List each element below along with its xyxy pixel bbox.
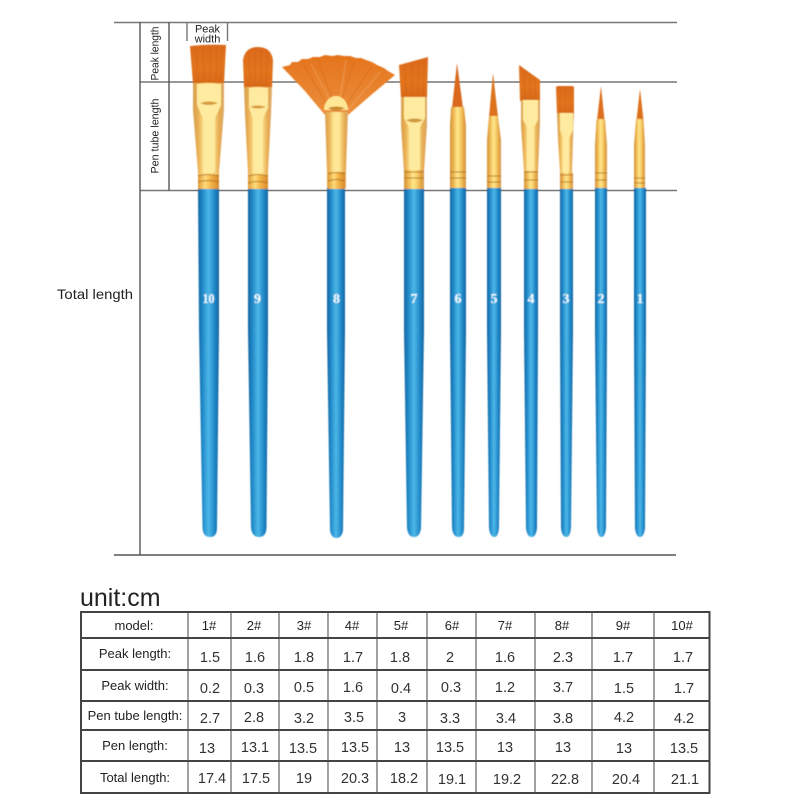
row: peak width: 1.6 xyxy=(343,680,363,696)
label: peak width: Peak xyxy=(195,24,221,36)
row: pen tube length: 4.2 xyxy=(674,711,694,727)
row: model: 7# xyxy=(498,618,513,633)
row: peak length: Peak length: xyxy=(99,646,171,661)
row: model: 2# xyxy=(247,618,262,633)
row: total length: 18.2 xyxy=(390,771,418,787)
brush 7: 7 xyxy=(410,292,418,307)
label: peak width: width xyxy=(194,34,220,46)
brush 7 xyxy=(399,57,428,537)
brush 5: 5 xyxy=(490,292,498,307)
label: total length: Total length xyxy=(57,286,133,302)
row: pen length: 13.5 xyxy=(289,741,317,757)
row: peak width: 1.2 xyxy=(495,680,515,696)
row: peak width: 0.4 xyxy=(391,681,411,697)
row: pen tube length: 3.5 xyxy=(344,710,364,726)
brush 2 xyxy=(595,86,607,537)
row: peak length: 2.3 xyxy=(553,650,573,666)
row: total length: 17.4 xyxy=(198,771,226,787)
brush 9: 9 xyxy=(254,292,261,307)
row: pen tube length: 3.4 xyxy=(496,711,516,727)
row: peak length: 1.8 xyxy=(294,650,314,666)
row: peak length: 1.7 xyxy=(343,650,363,666)
row: model: 5# xyxy=(394,618,409,633)
brush 8: 8 xyxy=(333,292,340,307)
label: peak length: Peak length xyxy=(150,26,162,80)
row: peak width: 1.5 xyxy=(614,681,634,697)
row: total length: 21.1 xyxy=(671,772,699,788)
brush 5 xyxy=(487,73,501,537)
brush 3 xyxy=(556,86,574,537)
row: model: 6# xyxy=(445,618,460,633)
row: peak width: 1.7 xyxy=(674,681,694,697)
row: peak length: 1.7 xyxy=(613,650,633,666)
brush 10 xyxy=(190,45,226,537)
row: pen tube length: 3.2 xyxy=(294,711,314,727)
row: pen length xyxy=(102,738,698,757)
row: total length: Total length: xyxy=(100,770,170,785)
row: model: 3# xyxy=(297,618,312,633)
row: pen length: 13.5 xyxy=(341,740,369,756)
row: peak width: Peak width: xyxy=(101,678,169,693)
brush 1: 1 xyxy=(636,292,644,307)
row: total length: 19.1 xyxy=(438,772,466,788)
row: model: 9# xyxy=(616,618,631,633)
row: peak length: 1.7 xyxy=(673,650,693,666)
row: total length: 20.4 xyxy=(612,772,640,788)
row: total length: 19.2 xyxy=(493,772,521,788)
row: pen length: 13.5 xyxy=(670,741,698,757)
row: pen tube length xyxy=(88,708,694,727)
brush 9 xyxy=(243,47,273,537)
row: model: 8# xyxy=(555,618,570,633)
row: peak width: 3.7 xyxy=(553,680,573,696)
row: total length: 22.8 xyxy=(551,772,579,788)
row: pen tube length: 4.2 xyxy=(614,710,634,726)
row: pen length: 13 xyxy=(497,740,513,756)
row: pen length: 13.5 xyxy=(436,740,464,756)
row: peak length: 2 xyxy=(446,650,454,666)
brush 4: 4 xyxy=(528,292,534,307)
brush 10: 10 xyxy=(202,292,214,307)
row: pen length: 13 xyxy=(616,741,632,757)
row: peak width: 0.3 xyxy=(441,680,461,696)
row: pen tube length: 2.8 xyxy=(244,710,264,726)
brush 4 xyxy=(519,65,540,537)
row: pen length: 13 xyxy=(555,740,571,756)
row: model: model: xyxy=(114,618,154,633)
row: model: 10# xyxy=(671,618,694,633)
measurement guide lines xyxy=(114,22,677,555)
brush 8 xyxy=(282,55,395,538)
unit label: unit:cm xyxy=(80,584,161,612)
row: pen length: Pen length: xyxy=(102,738,168,753)
brush 6: 6 xyxy=(454,292,462,307)
row: pen tube length: 3.3 xyxy=(440,711,460,727)
row: model xyxy=(114,618,694,633)
row: pen tube length: 3 xyxy=(398,710,406,726)
row: peak width: 0.5 xyxy=(294,680,314,696)
row: model: 1# xyxy=(202,618,217,633)
brush 2: 2 xyxy=(598,292,604,307)
row: pen tube length: 3.8 xyxy=(553,711,573,727)
row: pen tube length: 2.7 xyxy=(200,711,220,727)
row: peak length: 1.6 xyxy=(245,650,265,666)
brush 6 xyxy=(450,63,466,537)
row: model: 4# xyxy=(345,618,360,633)
row: peak length xyxy=(99,646,693,666)
row: peak length: 1.6 xyxy=(495,650,515,666)
row: peak length: 1.5 xyxy=(200,650,220,666)
row: total length xyxy=(100,770,699,788)
row: total length: 17.5 xyxy=(242,771,270,787)
row: total length: 20.3 xyxy=(341,771,369,787)
brush 3: 3 xyxy=(562,292,570,307)
brush 1 xyxy=(634,89,646,537)
row: peak width: 0.2 xyxy=(200,681,220,697)
label: pen tube length: Pen tube length xyxy=(150,98,162,174)
row: pen length: 13.1 xyxy=(241,740,269,756)
row: peak width xyxy=(101,678,694,697)
row: pen tube length: Pen tube length: xyxy=(88,708,182,723)
row: peak width: 0.3 xyxy=(244,681,264,697)
row: peak length: 1.8 xyxy=(390,650,410,666)
row: total length: 19 xyxy=(296,771,312,787)
size table xyxy=(81,612,710,793)
label: peak width xyxy=(194,24,221,46)
row: pen length: 13 xyxy=(394,740,410,756)
row: pen length: 13 xyxy=(199,741,215,757)
